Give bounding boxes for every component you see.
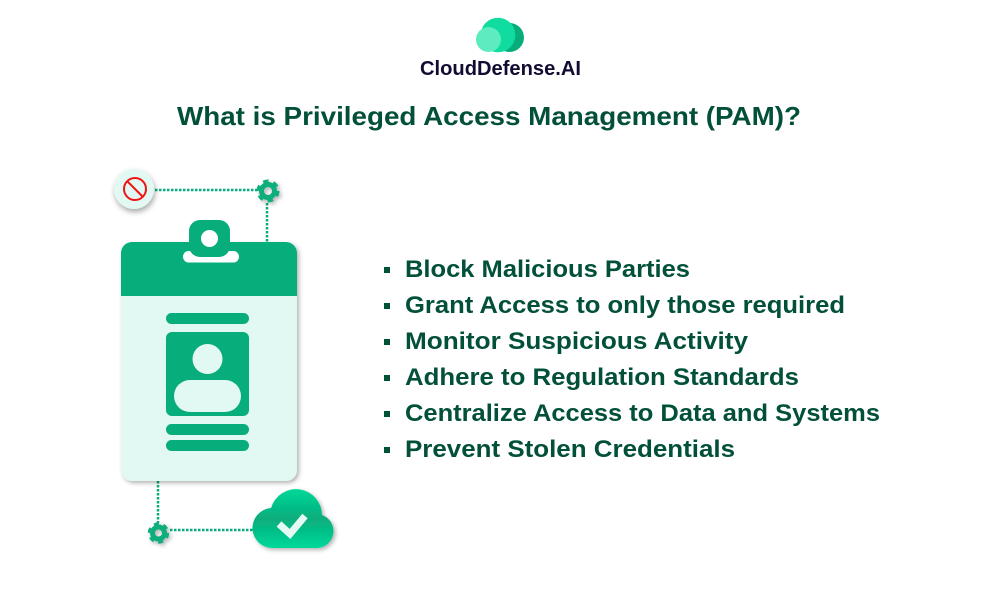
- dotted connector: bottom gear to cloud: [158, 481, 256, 530]
- lanyard slot: [183, 251, 239, 262]
- info bar 2: [166, 440, 249, 451]
- title: What is Privileged Access Management (PAM)?: [177, 101, 801, 131]
- top bar: [166, 313, 249, 324]
- icon: top gear: [258, 181, 278, 201]
- item 1: Block Malicious Parties: [405, 256, 690, 283]
- info bar 1: [166, 424, 249, 435]
- logo icon: cloud circles: [476, 18, 524, 52]
- item 5: Centralize Access to Data and Systems: [405, 400, 880, 427]
- dotted connector: block icon to top gear: [155, 190, 267, 242]
- item 3: Monitor Suspicious Activity: [405, 328, 749, 355]
- photo: [166, 332, 249, 416]
- clip: [189, 220, 230, 257]
- icon: bottom gear: [149, 524, 168, 542]
- card body: [121, 242, 297, 481]
- badge card: [121, 220, 297, 481]
- logo wordmark: CloudDefense.AI: [420, 58, 581, 80]
- item 6: Prevent Stolen Credentials: [405, 436, 735, 463]
- illustration: access badge: [114, 169, 333, 548]
- card header: [121, 242, 297, 296]
- item 4: Adhere to Regulation Standards: [405, 364, 799, 391]
- icon: cloud with check: [252, 489, 333, 548]
- bullet list: [384, 256, 880, 463]
- clip hole: [201, 230, 218, 247]
- logo: [420, 18, 581, 80]
- item 2: Grant Access to only those required: [405, 292, 845, 319]
- icon: block sign: [114, 169, 154, 209]
